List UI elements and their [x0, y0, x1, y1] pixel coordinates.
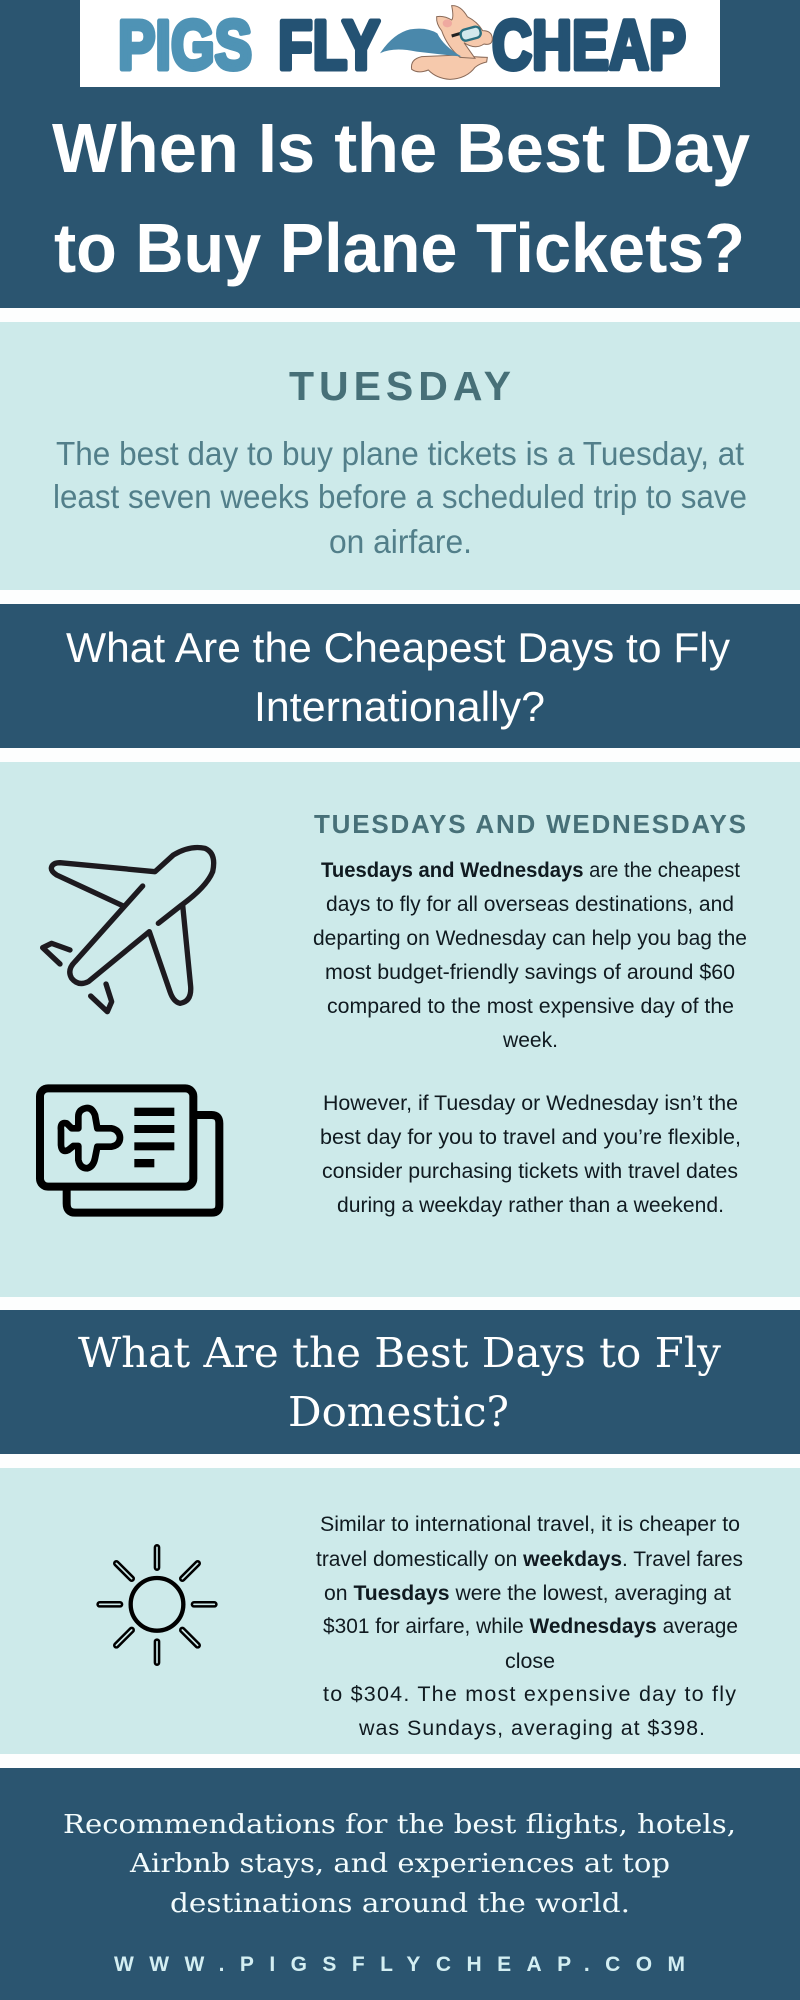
text block: domestic fares: was Sundays, averaging at $398. [358, 1716, 705, 1740]
text block: domestic fares: travel domestically on weekdays. Travel fares [316, 1547, 743, 1571]
text block: flexible travel advice [320, 1091, 741, 1217]
panel: domestic heading: What Are the Best Days to Fly [78, 1329, 722, 1377]
text block: recommendations: destinations around the world. [170, 1889, 630, 1919]
heading: Tuesday: TUESDAY [289, 363, 511, 409]
logo: Pigs Fly Cheap: CHEAP [492, 6, 686, 84]
title: When Is the Best Day [52, 109, 750, 187]
text block: best day summary: on airfare. [329, 524, 472, 561]
text block: flexible travel advice: However, if Tuesday or Wednesday isn’t the [323, 1091, 738, 1115]
panel: international heading: What Are the Cheapest Days to Fly [66, 624, 730, 671]
text block: cheapest days: week. [502, 1028, 558, 1052]
panel: domestic details [0, 1468, 800, 1754]
text block: best day summary [53, 436, 747, 561]
text block: best day summary: least seven weeks before a scheduled trip to save [53, 479, 747, 516]
text block: domestic fares: close [505, 1649, 555, 1673]
text block: domestic fares: $301 for airfare, while Wednesdays average [323, 1614, 738, 1638]
logo: Pigs Fly Cheap [80, 0, 720, 87]
text block: flexible travel advice: best day for you to travel and you’re flexible, [320, 1125, 741, 1149]
icon: sun [100, 1547, 214, 1663]
panel: international details [0, 762, 800, 1297]
logo: Pigs Fly Cheap: FLY [278, 6, 380, 84]
panel: header [0, 0, 800, 308]
text block: cheapest days [313, 858, 747, 1052]
text block: domestic fares: Similar to international travel, it is cheaper to [320, 1512, 740, 1536]
panel: domestic heading [0, 1310, 800, 1454]
panel: domestic heading: Domestic? [288, 1388, 509, 1436]
text block: cheapest days: compared to the most expensive day of the [327, 994, 734, 1018]
website address: WWW.PIGSFLYCHEAP.COM [114, 1953, 685, 1976]
text block: recommendations: Airbnb stays, and experiences at top [129, 1849, 670, 1879]
text block: flexible travel advice: during a weekday rather than a weekend. [337, 1193, 724, 1217]
subheading: Tuesdays and Wednesdays: TUESDAYS AND WEDNESDAYS [314, 809, 746, 839]
text block: domestic fares: to $304. The most expensive day to fly [323, 1682, 736, 1706]
panel: international heading: Internationally? [254, 683, 545, 730]
panel: footer [0, 1768, 800, 2000]
text block: flexible travel advice: consider purchasing tickets with travel dates [322, 1159, 738, 1183]
text block: recommendations: Recommendations for the best flights, hotels, [63, 1810, 736, 1840]
text block: best day summary: The best day to buy plane tickets is a Tuesday, at [56, 436, 745, 473]
title: to Buy Plane Tickets? [54, 209, 745, 287]
text block: cheapest days: most budget-friendly savings of around $60 [325, 960, 735, 984]
title [52, 109, 750, 287]
text block: domestic fares: on Tuesdays were the lowest, averaging at [324, 1581, 731, 1605]
panel: Tuesday answer [0, 322, 800, 590]
icon: tickets [40, 1088, 219, 1213]
icon: airplane [43, 847, 214, 1012]
text block: cheapest days: departing on Wednesday can help you bag the [313, 926, 747, 950]
logo: Pigs Fly Cheap: PIGS [118, 6, 252, 84]
text block: domestic fares [316, 1512, 743, 1740]
text block: cheapest days: days to fly for all overseas destinations, and [326, 892, 734, 916]
panel: international heading [0, 604, 800, 748]
text block: cheapest days: Tuesdays and Wednesdays are the cheapest [321, 858, 740, 882]
text block: recommendations [63, 1810, 736, 1919]
